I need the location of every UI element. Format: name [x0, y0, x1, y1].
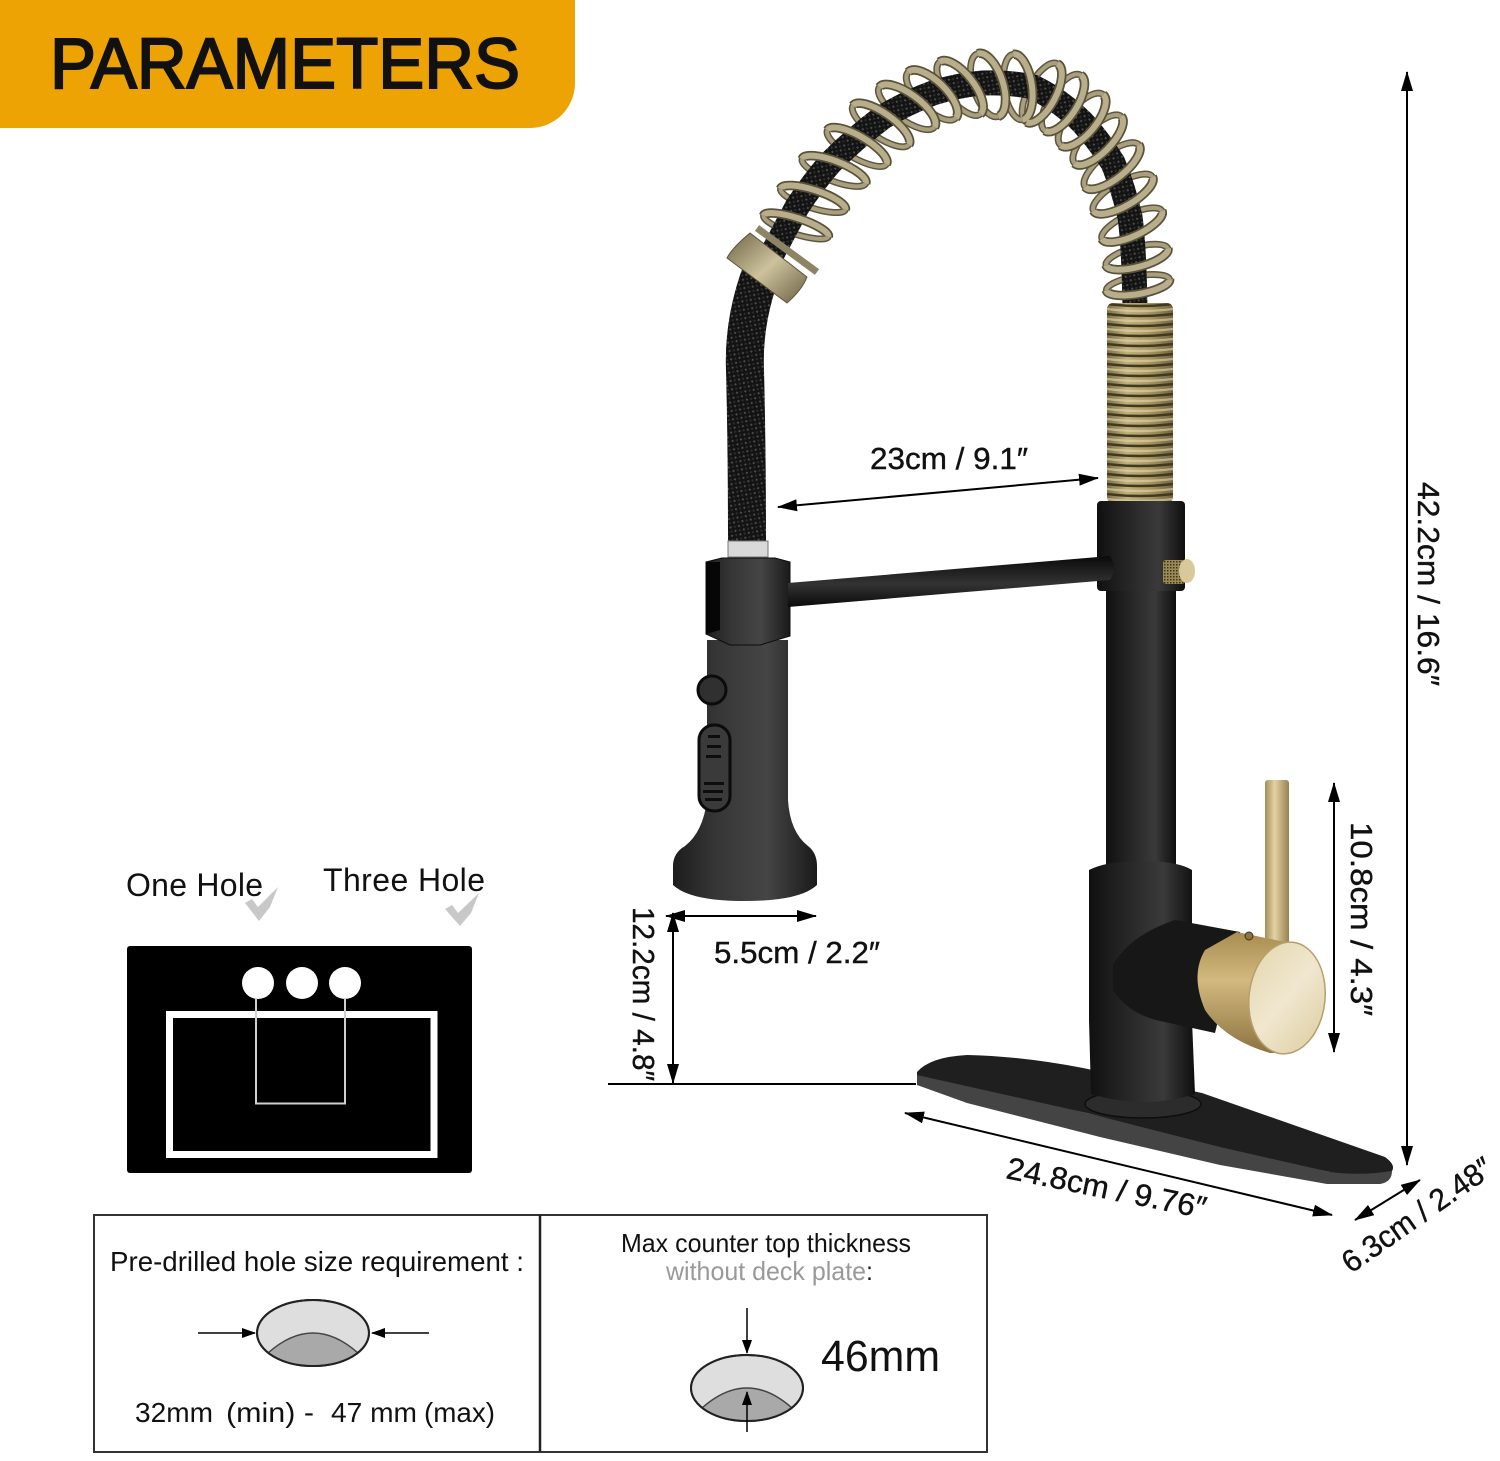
label: three hole: Three Hole	[323, 862, 485, 898]
mounting holes	[242, 967, 361, 999]
dimension: plate length 24.8cm	[905, 1113, 1332, 1225]
handle screw	[1245, 932, 1253, 940]
panel: sink diagram	[127, 946, 472, 1173]
tight gold spring	[1107, 303, 1173, 503]
handle face	[1243, 938, 1331, 1058]
dimension: lever height 10.8cm: 10.8cm / 4.3″	[1344, 822, 1379, 1016]
dimension: spout reach 23cm: 23cm / 9.1″	[870, 441, 1028, 476]
spring back loops	[761, 49, 1171, 299]
spray head	[673, 558, 817, 901]
base body	[1089, 862, 1195, 1102]
value: 46mm: 46mm	[821, 1332, 940, 1381]
spray collar	[706, 558, 790, 645]
icon: hole size diagram	[198, 1300, 429, 1366]
spray button	[698, 676, 726, 704]
sink basin outline	[170, 1014, 434, 1154]
panel: header banner	[0, 0, 575, 128]
handle	[1198, 780, 1331, 1058]
dimension: spray clearance 12.2cm: 12.2cm / 4.8″	[626, 907, 661, 1081]
spring front loops	[761, 49, 1171, 299]
handle hub	[1198, 932, 1285, 1053]
dimension: plate width 6.3cm: 6.3cm / 2.48″	[1335, 1150, 1499, 1280]
icon: check three hole	[445, 893, 479, 926]
dimension: height 42.2cm: 42.2cm / 16.6″	[1411, 482, 1446, 686]
text: hole size range: (max)	[424, 1397, 495, 1428]
text: hole size range: (min) -	[226, 1397, 314, 1428]
subheading: without deck plate: without deck plate:	[665, 1256, 873, 1286]
gold hose collar	[727, 228, 817, 303]
lower braided hose	[745, 270, 762, 545]
text: hole size range: 32mm	[135, 1397, 213, 1428]
crossbar	[788, 556, 1114, 607]
label: one hole: One Hole	[126, 867, 263, 903]
text: hole size range: 47 mm	[331, 1397, 417, 1428]
dimension: spray head 5.5cm: 5.5cm / 2.2″	[714, 935, 880, 970]
gold lock knob	[1163, 559, 1195, 584]
upper braided hose	[770, 83, 1135, 310]
side arm	[1113, 920, 1240, 1033]
icon: check one hole	[245, 887, 278, 921]
dimension: plate length 24.8cm: 24.8cm / 9.76″	[1004, 1151, 1210, 1225]
heading: counter thickness: Max counter top thickness	[621, 1228, 911, 1258]
panel: hole size and thickness table	[94, 1215, 987, 1452]
icon: thickness diagram	[691, 1308, 803, 1432]
handle lever	[1265, 780, 1289, 950]
chrome ring	[728, 541, 768, 557]
deck plate	[917, 1055, 1393, 1184]
flange	[1085, 1090, 1201, 1118]
hole span bracket	[256, 998, 345, 1104]
title: PARAMETERS	[50, 25, 520, 104]
dimension: spout reach 23cm	[778, 441, 1098, 507]
column top sleeve	[1097, 501, 1185, 591]
text: hole size range	[135, 1397, 495, 1428]
heading: hole size: Pre-drilled hole size requirement :	[110, 1246, 524, 1277]
spray paddle	[699, 725, 730, 811]
spray body	[673, 640, 817, 901]
main column	[1085, 501, 1240, 1118]
faucet illustration	[673, 49, 1393, 1184]
